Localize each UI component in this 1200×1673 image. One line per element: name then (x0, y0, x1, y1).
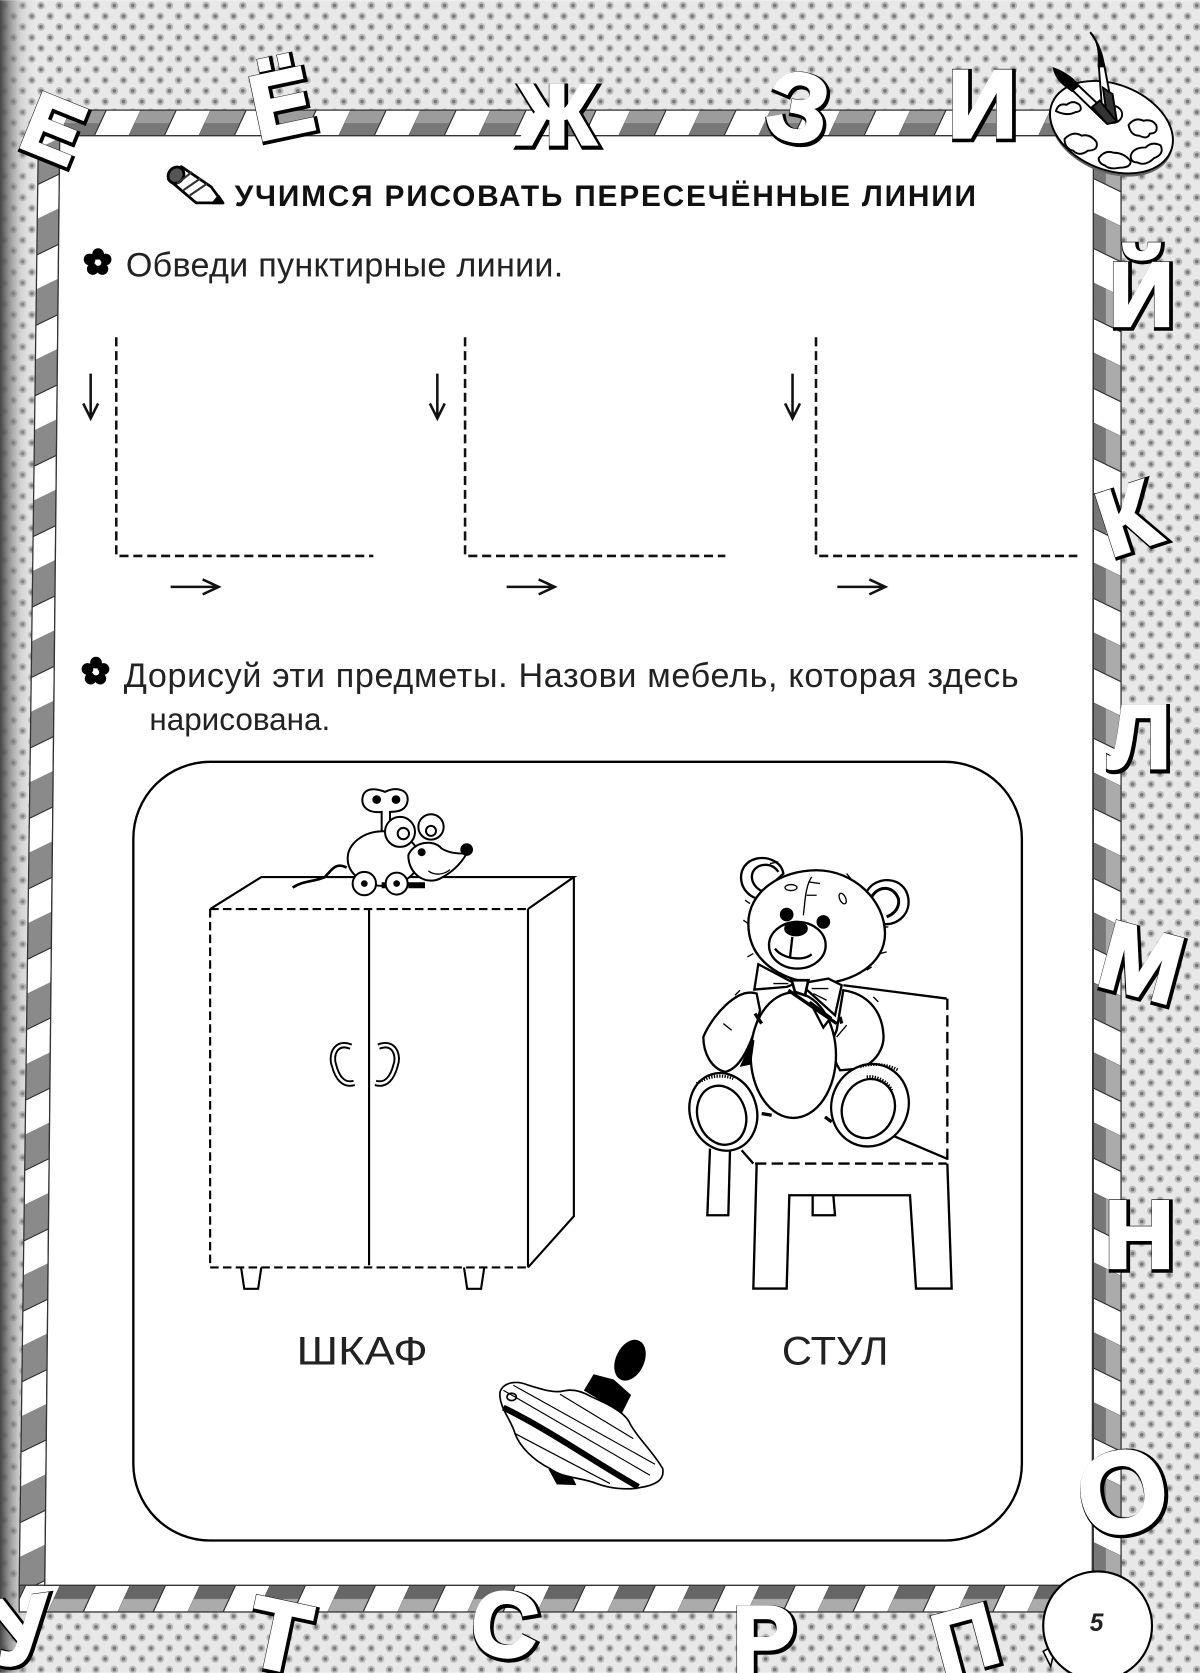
letter Ж: Ж (519, 70, 598, 165)
letter И: И (948, 51, 1017, 158)
icon: pencil (165, 164, 223, 203)
page number circle (1043, 1571, 1152, 1673)
panel: furniture drawing (133, 762, 1022, 1540)
letter З: З (761, 52, 838, 168)
instruction 2: нарисована. (149, 702, 330, 737)
cupboard (210, 877, 574, 1289)
letter Ж: Ж (517, 68, 596, 163)
letter З: З (759, 50, 837, 166)
letter К: К (1085, 462, 1171, 576)
chair (707, 985, 952, 1289)
tracing exercise: dashed corners and arrows (83, 337, 1077, 594)
instruction 2 (124, 657, 1019, 737)
letter М: М (1089, 901, 1194, 1025)
corner 3 (785, 337, 1077, 594)
palette with brushes (1036, 32, 1187, 194)
letter Н: Н (1106, 1183, 1175, 1290)
page number circle: 5 (1090, 1610, 1104, 1637)
letter О: О (1065, 1421, 1180, 1565)
label: cupboard: ШКАФ (297, 1330, 428, 1373)
letter Й: Й (1111, 246, 1175, 346)
letter Е: Е (10, 77, 98, 186)
toy mouse (293, 789, 472, 895)
letter К: К (1087, 463, 1173, 577)
letter Ё: Ё (243, 49, 324, 162)
teddy bear (679, 858, 921, 1160)
letter М: М (1090, 903, 1195, 1027)
letter О: О (1067, 1422, 1182, 1566)
instruction 1: Обведи пунктирные линии. (126, 247, 563, 284)
letter Е: Е (9, 75, 98, 184)
instruction 2: Дорисуй эти предметы. Назови мебель, которая здесь (124, 657, 1019, 695)
label: chair: СТУЛ (782, 1330, 889, 1373)
letter И: И (950, 52, 1018, 159)
title: УЧИМСЯ РИСОВАТЬ ПЕРЕСЕЧЁННЫЕ ЛИНИИ (235, 180, 976, 213)
white page panel (45, 136, 1093, 1585)
icon: flower bullet 1 (84, 248, 111, 275)
book spine shadow (0, 0, 36, 1673)
letter Н: Н (1105, 1181, 1174, 1288)
icon: flower bullet 2 (82, 657, 109, 684)
letter Л: Л (1109, 689, 1172, 789)
spinning top (500, 1336, 663, 1489)
corner 2 (430, 337, 725, 594)
letter Ё: Ё (241, 48, 322, 161)
corner 1 (83, 337, 373, 594)
letter Й: Й (1109, 245, 1174, 345)
letter Л: Л (1108, 687, 1171, 787)
